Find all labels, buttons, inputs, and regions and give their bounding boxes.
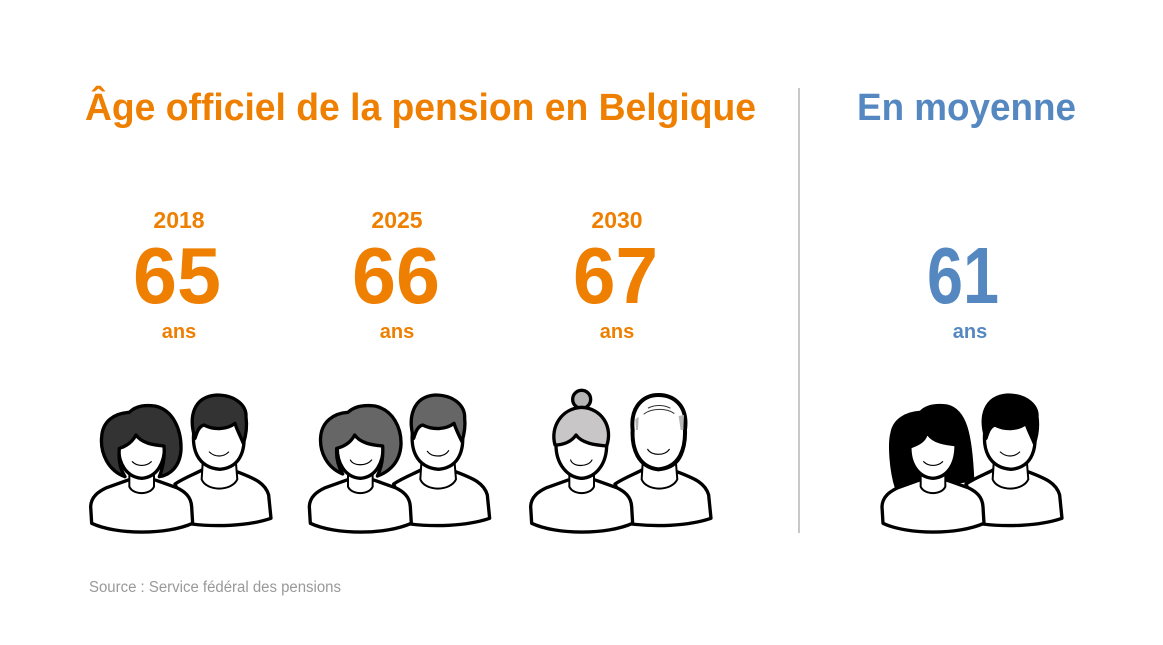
stat: 2025: 2025 xyxy=(371,207,423,233)
stat: 2030: 2030 xyxy=(591,207,643,233)
stat: 2018: 2018 xyxy=(153,207,205,233)
stat: average xyxy=(927,231,999,343)
stat: 2018: 65 xyxy=(133,231,221,320)
stat: 2025: ans xyxy=(380,321,414,343)
stat: 2025: 66 xyxy=(352,231,440,320)
stat: average: 61 xyxy=(927,231,999,320)
icon: couple 2025 xyxy=(309,395,490,532)
stat: 2018 xyxy=(133,207,221,343)
stat: 2025 xyxy=(352,207,440,343)
stat: 2030: ans xyxy=(600,321,634,343)
icon: couple 2018 xyxy=(91,395,271,532)
stat: 2018: ans xyxy=(162,321,196,343)
heading: En moyenne: En moyenne xyxy=(857,87,1076,129)
stat: 2030 xyxy=(573,207,658,343)
icon: couple 2030 xyxy=(531,390,711,532)
source note: Source : Service fédéral des pensions xyxy=(89,579,341,596)
title: Âge officiel de la pension en Belgique xyxy=(85,85,756,129)
vertical divider xyxy=(798,88,800,533)
stat: average: ans xyxy=(953,321,987,343)
stat: 2030: 67 xyxy=(573,231,658,320)
icon: couple average xyxy=(882,395,1062,532)
